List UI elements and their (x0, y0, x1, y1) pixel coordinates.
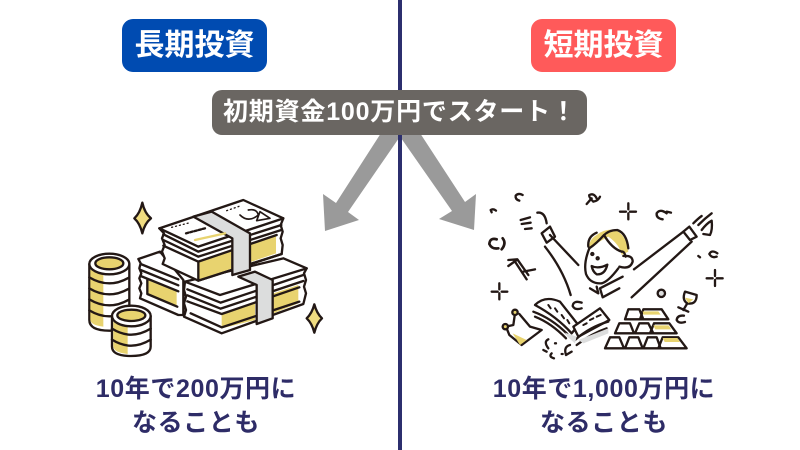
flying coins and sparkles (489, 194, 723, 323)
open book (533, 299, 609, 345)
money stack bottom right (184, 258, 307, 333)
heading: short-term investment: 短期投資 (544, 29, 664, 62)
result text: short-term: なることも (540, 409, 668, 437)
result text: long-term: 10年で200万円に (96, 375, 296, 403)
icon: coin stack large (89, 254, 129, 331)
goblet (678, 292, 697, 312)
icon: sparkle right (307, 304, 322, 333)
result text: short-term: 10年で1,000万円に (493, 375, 715, 403)
money stack top (159, 200, 283, 281)
scattered small coins (543, 339, 572, 358)
heading: long-term investment (122, 19, 267, 72)
start banner: 初期資金100万円でスタート！ (223, 98, 577, 126)
person (521, 213, 712, 297)
result text: long-term: なることも (132, 409, 260, 437)
gold bars (605, 309, 687, 348)
icon: coin stack small (112, 306, 151, 356)
heading: long-term investment: 長期投資 (134, 29, 254, 62)
start banner (212, 90, 587, 135)
icon: sparkle left (134, 203, 151, 233)
crown (503, 310, 542, 345)
result text: short-term (493, 375, 715, 437)
center divider line (398, 0, 402, 450)
money stack bottom left (138, 252, 183, 315)
heading: short-term investment (531, 19, 676, 72)
result text: long-term (96, 375, 296, 437)
